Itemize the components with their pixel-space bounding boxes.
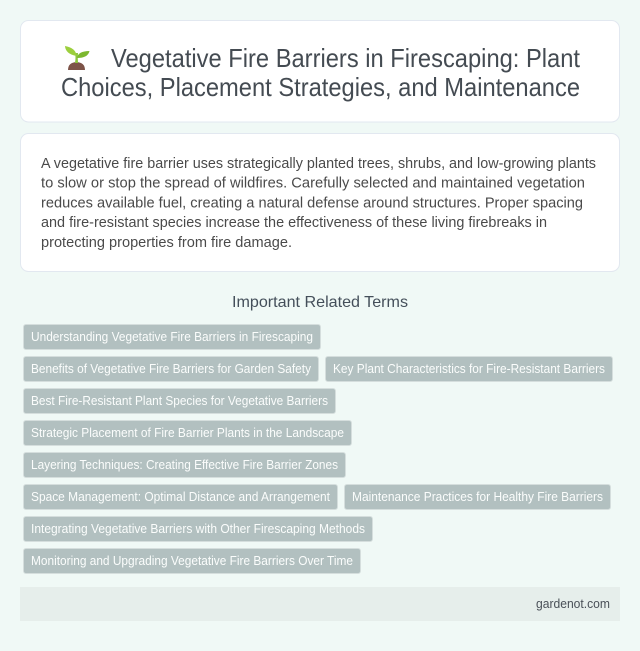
footer	[20, 587, 620, 621]
title: Vegetative Fire Barriers in Firescaping: Plant	[111, 43, 581, 73]
panel: description card	[20, 134, 620, 272]
tag	[24, 420, 352, 446]
tag	[344, 484, 610, 510]
tag: Integrating Vegetative Barriers with Other Firescaping Methods	[31, 521, 365, 536]
heading: important related terms: Important Related Terms	[232, 294, 408, 311]
text block: description: protecting properties from fire damage.	[41, 234, 292, 251]
title: Choices, Placement Strategies, and Maintenance	[61, 72, 580, 102]
tag list	[24, 324, 612, 574]
tag	[24, 452, 346, 478]
tag: Layering Techniques: Creating Effective Fire Barrier Zones	[31, 457, 338, 472]
tag	[24, 548, 360, 574]
tag: Key Plant Characteristics for Fire-Resistant Barriers	[333, 361, 605, 376]
tag: Understanding Vegetative Fire Barriers in Firescaping	[31, 329, 313, 344]
tag	[24, 356, 318, 382]
tag: Benefits of Vegetative Fire Barriers for Garden Safety	[31, 361, 312, 376]
panel: title card	[20, 20, 620, 122]
text block: description	[41, 155, 596, 251]
icon: seedling	[65, 46, 90, 70]
text block: description: reduces available fuel, creating a natural defense around structures. Proper spacing	[41, 194, 583, 212]
tag: Best Fire-Resistant Plant Species for Vegetative Barriers	[31, 393, 328, 408]
tag	[326, 356, 612, 382]
text block: description: to slow or stop the spread of wildfires. Carefully selected and maintained vegetation	[41, 174, 585, 192]
tag: Strategic Placement of Fire Barrier Plants in the Landscape	[31, 425, 344, 440]
text block: description: and fire-resistant species increase the effectiveness of these living firebreaks in	[41, 214, 547, 231]
title	[61, 43, 581, 102]
tag	[24, 484, 338, 510]
tag	[24, 516, 372, 542]
tag: Space Management: Optimal Distance and Arrangement	[31, 489, 330, 504]
tag: Maintenance Practices for Healthy Fire Barriers	[352, 489, 603, 504]
tag: Monitoring and Upgrading Vegetative Fire Barriers Over Time	[31, 553, 353, 568]
footer: gardenot.com	[536, 597, 610, 611]
tag	[24, 388, 336, 414]
text block: description: A vegetative fire barrier uses strategically planted trees, shrubs, and low-growing plants	[41, 155, 596, 172]
tag	[24, 324, 320, 350]
